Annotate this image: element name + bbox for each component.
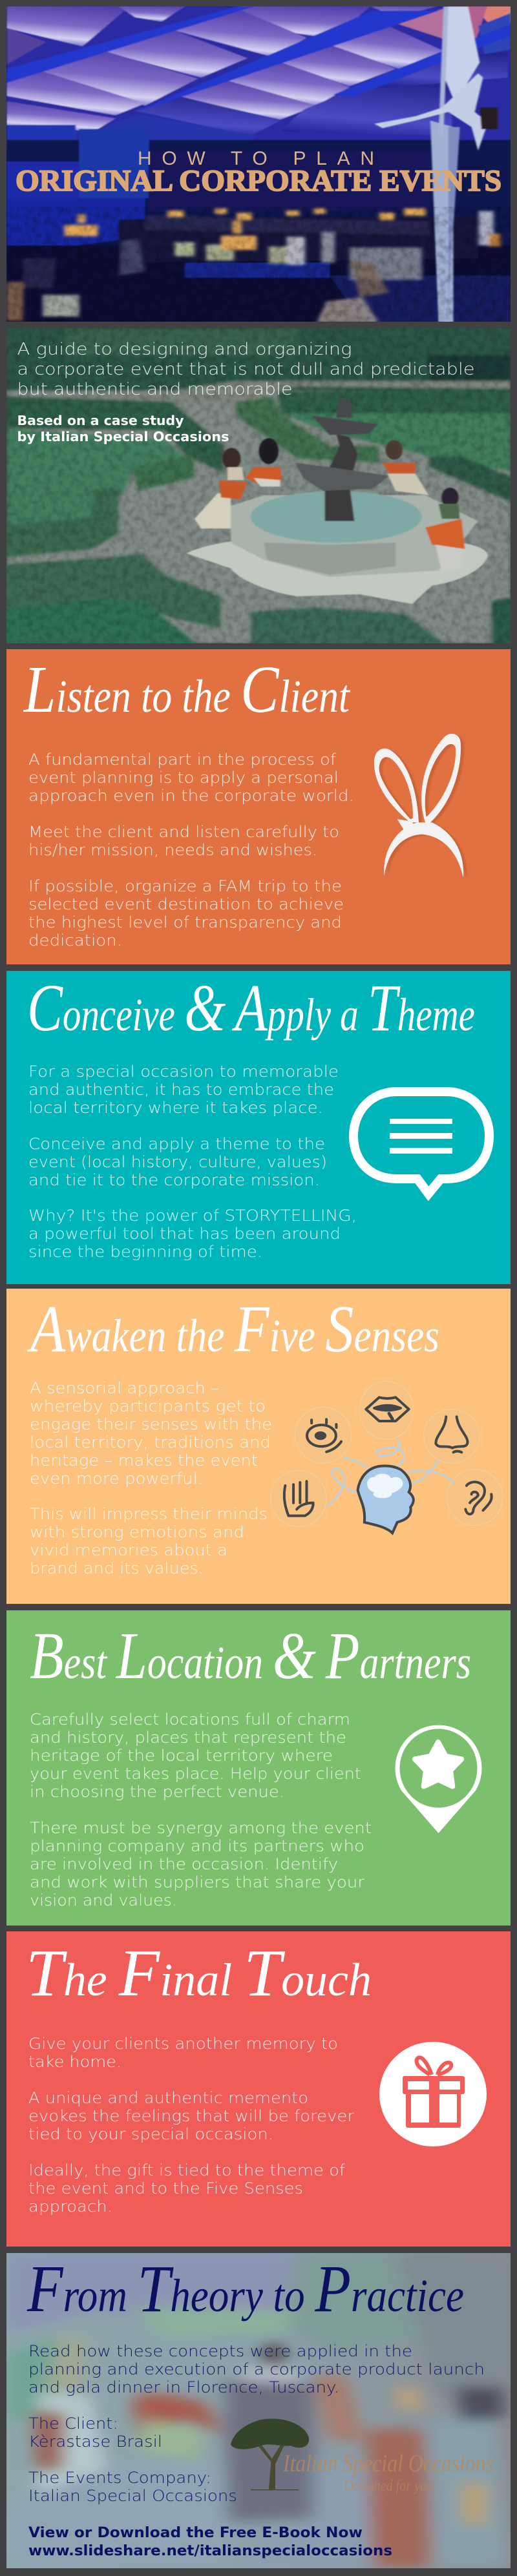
- intro text: [17, 340, 474, 399]
- panel: the final touch: [6, 1931, 511, 2247]
- text block: final touch: Ideally, the gift is tied to the theme of: [28, 2161, 346, 2179]
- text block: senses: whereby participants get to: [30, 1397, 266, 1415]
- text block: senses: [30, 1379, 272, 1577]
- text block: final touch: A unique and authentic memento: [28, 2089, 308, 2107]
- text block: final touch: [28, 2035, 354, 2216]
- text block: theme: local territory where it takes place.: [28, 1099, 323, 1117]
- logo: italian special occasions wordmark: Designed for you: [343, 2478, 433, 2495]
- heading: from theory to practice: From Theory to Practice: [26, 2252, 464, 2326]
- subheading: case study: Based on a case study: [17, 413, 184, 428]
- text block: final touch: approach.: [28, 2197, 112, 2216]
- text block: location: Carefully select locations full of charm: [30, 1710, 350, 1729]
- text block: senses: local territory, traditions and: [30, 1433, 271, 1451]
- text block: case study: Kèrastase Brasil: [28, 2433, 162, 2451]
- icon: speech bubble: [353, 1092, 489, 1194]
- icon: gift in circle: [379, 2042, 487, 2146]
- text block: case study: planning and execution of a corporate product launch: [28, 2360, 485, 2378]
- text block: listen: A fundamental part in the process of: [28, 751, 337, 769]
- text block: final touch: take home.: [28, 2053, 121, 2071]
- text block: final touch: the event and to the Five Senses: [28, 2179, 303, 2197]
- text block: theme: Why? It's the power of STORYTELLING,: [28, 1207, 357, 1225]
- intro text: a corporate event that is not dull and predictable: [17, 360, 474, 379]
- text block: location: and history, places that represent the: [30, 1729, 346, 1747]
- call to action: [28, 2525, 392, 2559]
- text block: case study: Italian Special Occasions: [28, 2487, 237, 2505]
- text block: senses: engage their senses with the: [30, 1415, 272, 1433]
- intro text: A guide to designing and organizing: [17, 340, 352, 359]
- text block: final touch: Give your clients another memory to: [28, 2035, 338, 2053]
- text block: location: heritage of the local territory where: [30, 1747, 333, 1765]
- text block: theme: a powerful tool that has been around: [28, 1225, 341, 1243]
- text block: theme: For a special occasion to memorable: [28, 1063, 339, 1081]
- heading: listen to the client: Listen to the Client: [23, 652, 351, 727]
- text block: location: [30, 1710, 372, 1909]
- text block: theme: Conceive and apply a theme to the: [28, 1135, 325, 1153]
- text block: final touch: evokes the feelings that will be forever: [28, 2107, 354, 2125]
- logo: italian special occasions wordmark: [282, 2450, 494, 2495]
- icon: bunny ears: [374, 734, 467, 878]
- text block: listen: event planning is to apply a personal: [28, 769, 339, 787]
- text block: senses: heritage – makes the event: [30, 1451, 258, 1470]
- text block: location: planning company and its partners who: [30, 1837, 364, 1855]
- icon: five senses head: [270, 1381, 503, 1533]
- text block: senses: A sensorial approach –: [30, 1379, 219, 1397]
- panel: awaken the five senses: [6, 1289, 511, 1604]
- heading: original corporate events: ORIGINAL CORPORATE EVENTS: [16, 164, 501, 198]
- text block: senses: with strong emotions and: [30, 1523, 244, 1541]
- text block: location: your event takes place. Help your client: [30, 1765, 361, 1783]
- subheading: case study: [17, 413, 229, 444]
- text block: case study: Read how these concepts were applied in the: [28, 2342, 412, 2360]
- text block: case study: and gala dinner in Florence, Tuscany.: [28, 2378, 339, 2396]
- icon: map pin with star: [395, 1725, 482, 1833]
- text block: theme: and authentic, it has to embrace the: [28, 1081, 334, 1099]
- text block: listen: If possible, organize a FAM trip to the: [28, 877, 342, 895]
- text block: theme: event (local history, culture, values): [28, 1153, 327, 1171]
- text block: case study: The Events Company:: [28, 2469, 211, 2487]
- text block: theme: since the beginning of time.: [28, 1243, 262, 1261]
- text block: senses: vivid memories about a: [30, 1541, 227, 1559]
- text block: listen: Meet the client and listen carefully to: [28, 823, 339, 841]
- heading: the final touch: The Final Touch: [26, 1936, 372, 2010]
- text block: listen: dedication.: [28, 931, 122, 950]
- heading: awaken the five senses: Awaken the Five Senses: [27, 1292, 439, 1366]
- panel: from theory to practice: [6, 2252, 511, 2568]
- panel: hero photo with title: [6, 5, 514, 323]
- call to action: www.slideshare.net/italianspecialoccasions: [28, 2543, 392, 2559]
- text block: listen: his/her mission, needs and wishes.: [28, 841, 317, 859]
- intro text: but authentic and memorable: [17, 380, 292, 399]
- text block: location: There must be synergy among the event: [30, 1819, 372, 1837]
- text block: listen: selected event destination to achieve: [28, 895, 344, 913]
- text block: location: and work with suppliers that share your: [30, 1873, 364, 1891]
- text block: location: in choosing the perfect venue.: [30, 1783, 284, 1801]
- panel: listen to the client: [6, 649, 511, 964]
- text block: senses: brand and its values.: [30, 1559, 204, 1577]
- text block: location: vision and values.: [30, 1891, 177, 1909]
- text block: theme: and tie it to the corporate mission.: [28, 1171, 320, 1189]
- panel: fountain garden photo with intro: [3, 326, 514, 646]
- text block: senses: even more powerful.: [30, 1470, 203, 1488]
- panel: conceive and apply a theme: [6, 971, 511, 1284]
- panel: best location and partners: [6, 1610, 511, 1926]
- text block: case study: [28, 2342, 485, 2505]
- heading: best location and partners: Best Location & Partners: [30, 1619, 471, 1693]
- text block: theme: [28, 1063, 357, 1261]
- text block: senses: This will impress their minds: [30, 1505, 268, 1523]
- heading: how to plan: HOW TO PLAN: [138, 148, 374, 169]
- text block: listen: the highest level of transparency and: [28, 913, 342, 931]
- text block: case study: The Client:: [28, 2415, 118, 2433]
- text block: listen: [28, 751, 354, 950]
- text block: listen: approach even in the corporate world.: [28, 787, 354, 805]
- subheading: case study: by Italian Special Occasions: [17, 429, 229, 444]
- heading: conceive and apply a theme: Conceive & Apply a Theme: [27, 971, 475, 1045]
- logo: tree: [231, 2418, 309, 2490]
- text block: location: are involved in the occasion. Identify: [30, 1855, 338, 1873]
- text block: final touch: tied to your special occasion.: [28, 2125, 273, 2143]
- call to action: View or Download the Free E-Book Now: [28, 2525, 363, 2541]
